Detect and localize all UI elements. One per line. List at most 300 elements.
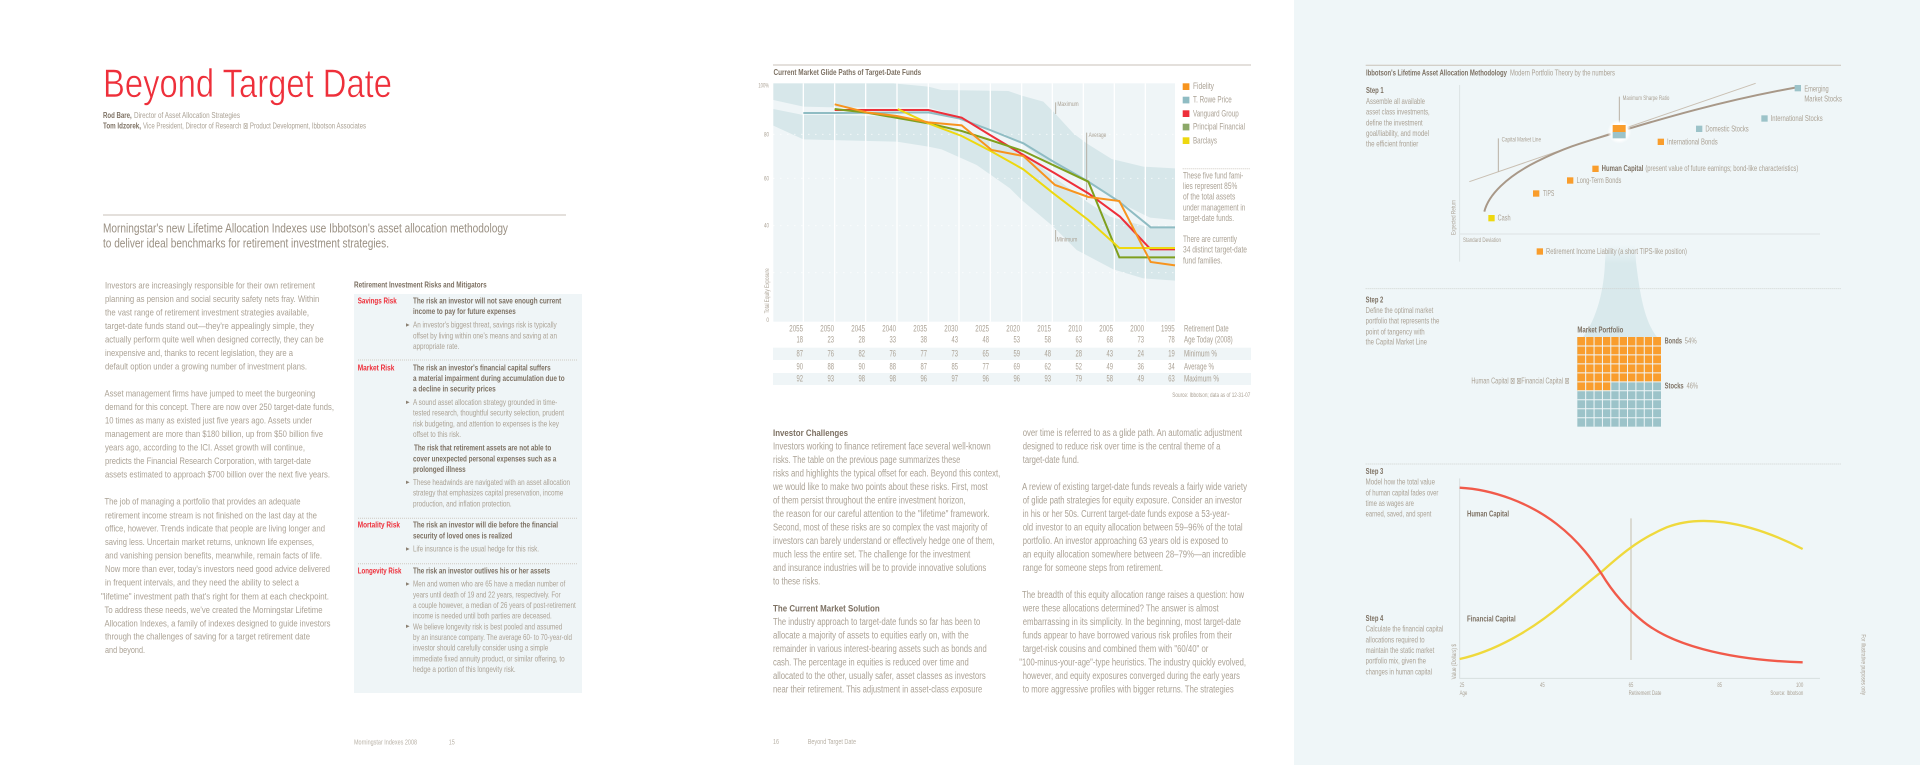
panel: retirement investment risks and mitigators: Retirement Investment Risks and Mitigators [354,280,487,289]
chart annotations: Expected Return [1451,200,1457,235]
text block: left body column: Now more than ever, today's investors need good advice delivered [105,564,330,575]
chart annotations [1451,96,1670,244]
text block: glide path column: old investor to an equity allocation between 59–96% of the total [1023,522,1243,533]
waffle labels: Human Capital ⊠ ⊠Financial Capital ⊠ [1471,375,1569,385]
row: maximum: 93 [1044,374,1051,384]
legend: Principal Financial [1193,122,1245,133]
text block: left body column: Allocation Indexes, a family of indexes designed to guide investors [104,618,331,629]
chart side note: 34 distinct target-date [1183,245,1247,256]
longevity risk: immediate fixed annuity product, or similar offering, to [413,654,565,663]
row: age today: 38 [920,334,927,344]
chart side note: There are currently [1183,234,1237,245]
asset class labels: Cash [1498,213,1511,223]
row: maximum: 63 [1168,374,1175,384]
step 1: Assemble all available [1366,96,1425,106]
text block: glide path column: of glide path strategies for equity exposure. Consider an investor [1023,495,1243,506]
chart side note: target-date funds. [1183,213,1234,224]
text block: investor challenges column: risks. The table on the previous page summarizes these [773,455,961,466]
footer: page 15: Morningstar Indexes 2008 [354,737,417,746]
intro deck: Morningstar's new Lifetime Allocation Indexes use Ibbotson's asset allocation methodology [103,222,509,236]
market risk: strategy that emphasizes capital preservation, income [413,489,564,498]
market risk: a material impairment during accumulation due to [413,374,565,383]
step 4 text [1366,613,1443,676]
waffle labels: 54% [1685,335,1697,345]
annotation lines [1056,102,1087,242]
legend: T. Rowe Price [1193,95,1232,106]
band: average to minimum range [773,109,1175,281]
line: barclays [898,109,1175,248]
longevity risk: Longevity Risk [358,566,402,575]
step 2 text: Step 2 [1366,294,1384,304]
text block: investor challenges column: risks and highlights the typical offset for each. Beyond this context, [773,468,1000,479]
row: maximum: 96 [920,374,927,384]
text block: investor challenges column: allocated to the other, usually safer, asset classes as investors [773,671,986,682]
data table [773,323,1251,385]
row: average: 69 [1014,361,1020,371]
authors: Tom Idzorek, [103,122,141,130]
y axis labels: Total Equity Exposure [765,268,771,313]
row: average: 77 [982,361,989,371]
text block: investor challenges column: Investors working to finance retirement face several well-known [773,441,991,452]
text block: glide path column: were these allocations determined? The answer is almost [1022,604,1219,614]
text block: investor challenges column: near their retirement. This adjustment in asset-class exposure [773,684,983,696]
chart: efficient frontier [1451,83,1842,262]
text block: investor challenges column: cash. The percentage in equities is reduced over time and [773,658,969,668]
authors [103,111,366,130]
chart side note: These five fund fami- [1183,170,1243,181]
asset class labels: TIPS [1543,188,1555,198]
text block: investor challenges column: Second, most of these risks are so complex the vast majority of [773,522,987,533]
market risk: offset to this risk. [413,430,461,439]
step 1 [1366,85,1430,149]
axis labels: Retirement Date [1629,691,1662,697]
waffle chart: market portfolio [1577,337,1661,427]
text block: left body column: 10 times as many as existed just five years ago. Assets under [105,415,312,426]
text block: left body column: office, however. Trends indicate that people are living longer and [105,524,325,535]
row: minimum: 48 [1044,348,1051,358]
row labels: Age Today (2008) [1184,334,1233,344]
row: maximum [796,374,1175,384]
chart side note: fund families. [1183,255,1222,266]
text block: investor challenges column: the reason for our careful attention to the "lifetime" framework. [773,509,990,520]
row: average: 87 [920,361,927,371]
market risk: The risk an investor's financial capital suffers [413,363,551,372]
longevity risk [358,566,576,674]
asset class labels: Emerging [1804,83,1829,93]
text block: left body column: management are more than $180 billion, up from $50 billion five [105,429,323,440]
waffle labels: Market Portfolio [1577,325,1623,335]
chart heading: glide paths: Current Market Glide Paths of Target-Date Funds [774,68,922,77]
step 4 text: changes in human capital [1366,666,1432,676]
row: average: 88 [890,361,896,371]
row: maximum: 79 [1076,374,1082,384]
row: retirement date: 2050 [820,323,834,333]
row: maximum: 98 [858,374,865,384]
source note: Source: Ibbotson; data as of 12-31-07 [1172,392,1251,399]
text block: investor challenges column [772,428,1000,696]
row: minimum: 87 [796,348,803,358]
row: maximum: 97 [952,374,958,384]
text block: glide path column: designed to reduce risk over time is the central theme of a [1023,441,1221,452]
footer: page 16 [773,737,856,746]
row: average: 34 [1168,361,1175,371]
savings risk: Savings Risk [358,296,397,305]
row: minimum: 28 [1076,348,1082,358]
row: retirement date: 2015 [1037,323,1051,333]
line: vanguard group [835,110,1175,249]
axis labels: Age [1460,691,1468,697]
step 3 text: of human capital fades over [1366,487,1438,497]
market risk: The risk that retirement assets are not able to [414,444,551,453]
text block: investor challenges column: investors can barely understand or effectively hedge one of them, [773,536,995,547]
savings risk: The risk an investor will not save enough current [413,296,562,305]
text block: left body column [101,280,334,656]
longevity risk: We believe longevity risk is best pooled and assumed [413,622,563,631]
row labels: Maximum % [1184,374,1219,384]
text block: investor challenges column: The Current Market Solution [773,604,880,615]
asset class labels: International Stocks [1771,113,1823,123]
asset class labels: International Bonds [1667,136,1718,146]
legend: Vanguard Group [1193,108,1239,119]
mortality risk: The risk an investor will die before the financial [413,521,558,530]
chart annotations: Standard Deviation [1463,238,1501,244]
row: minimum: 59 [1014,348,1020,358]
row: age today: 68 [1106,334,1113,344]
row: minimum: 73 [952,348,958,358]
line: t. rowe price [803,112,1175,227]
asset class labels: Market Stocks [1804,93,1842,103]
y axis labels: 80 [764,132,769,138]
beam: portfolio funnel [1583,245,1657,337]
text block: glide path column: A review of existing target-date funds reveals a fairly wide variety [1022,482,1247,493]
row: minimum: 19 [1168,348,1175,358]
savings risk: appropriate rate. [413,342,459,351]
text block: glide path column: portfolio. An investor approaching 63 years old is exposed to [1023,536,1228,547]
step 1: the efficient frontier [1366,139,1418,149]
row: retirement date: 2030 [944,323,958,333]
efficient frontier curve [1484,87,1797,212]
row: retirement date: 2020 [1006,323,1020,333]
axis labels: 100 [1796,683,1804,689]
intro deck: to deliver ideal benchmarks for retirement investment strategies. [103,236,389,250]
row: age today: 78 [1168,334,1175,344]
row: maximum: 58 [1106,374,1113,384]
market risk: a decline in security prices [413,385,496,394]
longevity risk: Men and women who are 65 have a median number of [413,580,566,589]
step 4 text: portfolio mix, given the [1366,656,1426,666]
chart annotations: Maximum Sharpe Ratio [1623,96,1670,102]
authors: Vice President, Director of Research ⊠ Product Development, Ibbotson Associates [143,122,366,130]
savings risk [358,296,562,351]
y axis labels: 40 [764,224,769,230]
mortality risk: security of loved ones is realized [413,531,512,540]
steps 3 and 4 with capital curves [1366,464,1865,697]
text block: left body column: years ago, according to the ICI. Asset growth will continue, [105,442,305,453]
text block: left body column: and vanishing pension benefits, meanwhile, remain facts of life. [105,551,322,562]
footer: page 16: 16 [773,737,779,746]
row: retirement date: 2000 [1130,323,1144,333]
text block: glide path column: funds appear to have borrowed various risk profiles from their [1023,630,1233,642]
step 4 text: Step 4 [1366,613,1384,623]
row: average: 52 [1076,361,1082,371]
waffle labels: Bonds [1665,335,1682,345]
row: average: 85 [952,361,958,371]
text block: left body column: "lifetime" investment path that's right for them at each checkpoint. [101,591,329,602]
step 1: define the investment [1366,117,1423,127]
step 3 text: Model how the total value [1366,477,1435,487]
row: retirement date: 2005 [1099,323,1113,333]
row: age today: 43 [952,334,958,344]
row: maximum: 49 [1138,374,1144,384]
row labels [1184,323,1233,384]
legend: Barclays [1193,135,1217,146]
text block: left body column: target-date funds stand out—they're appealingly simple, they [105,321,314,332]
row: average [796,361,1175,371]
longevity risk: income is needed until both parties are deceased. [413,612,552,621]
line chart: human and financial capital: Financial Capital [1467,613,1516,623]
text block: left body column: planning as pension and social security safety nets fray. Within [105,294,319,305]
row: average: 90 [796,361,803,371]
panel: right page background [1294,0,1920,765]
curve: human capital [1460,488,1803,662]
line chart: human and financial capital: Human Capital [1467,509,1509,519]
row: retirement date: 2025 [975,323,989,333]
step 3 text: earned, saved, and spent [1366,509,1432,519]
footer: page 16: Beyond Target Date [808,737,856,746]
row: minimum: 43 [1106,348,1113,358]
step 3 text: Step 3 [1366,466,1384,476]
asset class labels [1498,83,1842,256]
y axis labels: 0 [766,318,770,324]
row: age today: 33 [890,334,896,344]
text block: left body column: in frequent intervals, and they need the ability to select a [105,578,300,589]
asset class labels: Long-Term Bonds [1577,175,1621,185]
mortality risk: Mortality Risk [358,521,400,530]
longevity risk: hedge a portion of this longevity risk. [413,665,516,674]
text block: glide path column: target-date fund. [1023,455,1079,466]
step 4 text: maintain the static market [1366,645,1435,655]
axis labels: Source: Ibbotson [1770,691,1803,697]
asset class markers [1488,85,1801,255]
text block: left body column: through the challenges of saving for a target retirement date [105,632,310,643]
y axis labels: 100% [758,84,769,90]
text block: investor challenges column: and insurance industries will be to provide innovative solutions [773,563,986,574]
methodology heading: Modern Portfolio Theory by the numbers [1510,68,1615,78]
axis labels [1452,643,1804,697]
row: average: 88 [828,361,834,371]
panel: retirement investment risks and mitigators [354,280,582,693]
row: minimum: 76 [828,348,834,358]
text block: glide path column: to more aggressive profiles with bigger returns. The strategies [1023,684,1234,696]
market risk: prolonged illness [413,465,466,474]
row labels: Average % [1184,361,1214,371]
line: principal financial [835,109,1175,257]
authors: Director of Asset Allocation Strategies [134,111,240,120]
side note: illustrative purposes: For illustrative purposes only [1859,634,1865,695]
row: retirement date: 2035 [913,323,927,333]
row: retirement date: 1995 [1161,323,1175,333]
row: age today: 53 [1014,334,1020,344]
curve: financial capital [1460,521,1803,659]
row labels: Minimum % [1184,348,1217,358]
market risk: Market Risk [358,363,395,372]
text block: left body column: To address these needs, we've created the Morningstar Lifetime [104,605,322,616]
maximum sharpe ratio point [1607,120,1631,144]
text block: glide path column: "100-minus-your-age"-type heuristics. The industry quickly evolved, [1019,658,1246,668]
text block: left body column: retirement income stream is not finished on the last day at the [105,510,317,521]
row: maximum: 98 [890,374,896,384]
line chart: glide paths [758,83,1175,324]
text block: left body column: saving less. Uncertain market returns, unknown life expenses, [105,537,314,548]
row: retirement date [789,323,1175,333]
intro deck [103,215,566,250]
axis labels: Value (Dollars) $ [1452,643,1458,679]
annotation labels [1057,102,1107,243]
step 2 text: the Capital Market Line [1366,337,1427,347]
text block: glide path column: however, and equity exposures converged during the early years [1023,671,1240,682]
line chart: human and financial capital [1452,478,1820,697]
row: minimum: 82 [858,348,865,358]
text block: glide path column: an equity allocation somewhere between 28–79%—an incredible [1023,549,1246,560]
row: age today: 63 [1076,334,1082,344]
row: maximum: 93 [828,374,834,384]
longevity risk: investor should carefully consider using a simple [413,644,549,653]
annotation labels: Minimum [1057,237,1077,243]
row: age today: 18 [796,334,803,344]
text block: glide path column: over time is referred to as a glide path. An automatic adjustment [1023,428,1242,439]
savings risk: offset by living within one's means and saving at an [413,331,557,340]
text block: left body column: Asset management firms have jumped to meet the burgeoning [104,389,315,400]
legend: Fidelity [1193,81,1214,92]
chart side note: lies represent 85% [1183,181,1238,192]
text block: left body column: The job of managing a portfolio that provides an adequate [104,497,300,508]
row: age today: 28 [858,334,865,344]
row: minimum: 65 [982,348,989,358]
methodology heading [1366,65,1841,78]
row: average: 49 [1106,361,1113,371]
row: retirement date: 2045 [851,323,865,333]
step 1: asset class investments, [1366,107,1430,117]
step 1: goal/liability, and model [1366,128,1429,138]
row: average: 36 [1138,361,1144,371]
market risk [358,363,570,508]
step 3 text: time as wages are [1366,498,1414,508]
text block: investor challenges column: we would like to make two points about these risks. First, most [772,482,988,493]
footer: page 15: 15 [449,737,455,746]
capital market line [1469,83,1756,182]
text block: left body column: actually perform quite well when designed correctly, they can be [105,335,324,346]
row labels: Retirement Date [1184,323,1229,333]
waffle labels: 46% [1687,381,1698,391]
longevity risk: The risk an investor outlives his or her assets [413,566,550,575]
row: age today: 23 [828,334,834,344]
text block: investor challenges column: remainder in various interest-bearing assets such as bonds and [773,644,987,655]
row: retirement date: 2040 [882,323,896,333]
market risk: A sound asset allocation strategy grounded in time- [413,398,558,407]
longevity risk: by an insurance company. The average 60- to 70-year-old [413,633,572,642]
text block: glide path column: embarrassing in its simplicity. In the beginning, most target-date [1023,617,1241,628]
step 2 text: portfolio that represents the [1366,316,1440,326]
row: minimum [796,348,1175,358]
line: fidelity [835,104,1175,265]
band: maximum to average range [773,83,1175,220]
text block: glide path column [1019,428,1247,696]
chart side note: of the total assets [1183,192,1235,203]
longevity risk: a couple however, a median of 26 years of post-retirement [413,601,576,610]
mortality risk: Life insurance is the usual hedge for this risk. [413,545,539,554]
axis labels: 85 [1717,683,1722,689]
row: minimum: 77 [920,348,927,358]
text block: left body column: assets estimated to approach $700 billion over the next five years. [105,470,330,481]
step 4 text: Calculate the financial capital [1366,624,1443,634]
row: age today [796,334,1175,344]
text block: investor challenges column: Investor Challenges [773,428,848,439]
asset class labels: (present value of future earnings; bond-like characteristics) [1645,163,1798,173]
longevity risk: years until death of 19 and 22 years, respectively. For [413,590,561,599]
step 2 text: point of tangency with [1366,326,1425,336]
row: average: 90 [858,361,865,371]
axis labels: 25 [1460,683,1465,689]
text block: left body column: inexpensive and, thanks to recent legislation, they are a [105,348,294,359]
text block: glide path column: range for someone steps from retirement. [1023,563,1163,574]
row: maximum: 96 [982,374,989,384]
text block: investor challenges column: allocate a majority of assets to equities early on, with the [773,630,969,642]
savings risk: income to pay for future expenses [413,307,516,316]
step 3 text [1366,466,1438,519]
text block: left body column: default option under a growing number of investment plans. [105,361,307,372]
text block: left body column: predicts the Financial Research Corporation, with target-date [105,456,311,467]
text block: investor challenges column: much less the entire set. The challenge for the investment [773,549,970,560]
step 2 text: Define the optimal market [1366,305,1434,315]
step 4 text: allocations required to [1366,634,1425,644]
row: maximum: 96 [1014,374,1020,384]
row: age today: 58 [1044,334,1051,344]
text block: left body column: Investors are increasingly responsible for their own retirement [105,280,315,291]
text block: glide path column: target-risk cousins and combined them with "60/40" or [1023,644,1209,655]
text block: left body column: demand for this concept. There are now over 250 target-date funds, [105,402,334,413]
axis labels: 45 [1540,683,1545,689]
annotation labels: Maximum [1057,102,1079,108]
savings risk: An investor's biggest threat, savings risk is typically [413,321,557,330]
title: Beyond Target Date [103,62,392,106]
text block: investor challenges column: of them persist throughout the entire investment horizon, [773,495,966,506]
text block: glide path column: in his or her 50s. Current target-date funds expose a 53-year- [1023,509,1230,520]
y axis labels: 60 [764,176,769,182]
row: maximum: 92 [796,374,803,384]
row: age today: 73 [1138,334,1144,344]
asset class labels: Human Capital [1602,163,1643,173]
step 2 text [1366,294,1440,347]
chart annotations: Capital Market Line [1502,138,1542,144]
asset class labels: Retirement Income Liability (a short TIPS-like position) [1546,246,1687,256]
text block: left body column: and beyond. [105,645,145,656]
step 1: Step 1 [1366,85,1384,95]
market risk: cover unexpected personal expenses such as a [413,454,557,463]
row: minimum: 76 [890,348,896,358]
row: retirement date: 2055 [789,323,803,333]
waffle labels [1471,325,1698,391]
text block: investor challenges column: The industry approach to target-date funds so far has been to [773,617,981,628]
row: minimum: 24 [1138,348,1144,358]
text block: glide path column: The breadth of this equity allocation range raises a question: how [1022,590,1245,601]
row: age today: 48 [982,334,989,344]
legend [1183,81,1245,146]
row: retirement date: 2010 [1068,323,1082,333]
market risk: risk budgeting, and attention to expenses is the key [413,419,560,428]
market risk: These headwinds are navigated with an asset allocation [413,478,570,487]
chart side note [1183,169,1251,266]
y axis labels [758,84,771,324]
